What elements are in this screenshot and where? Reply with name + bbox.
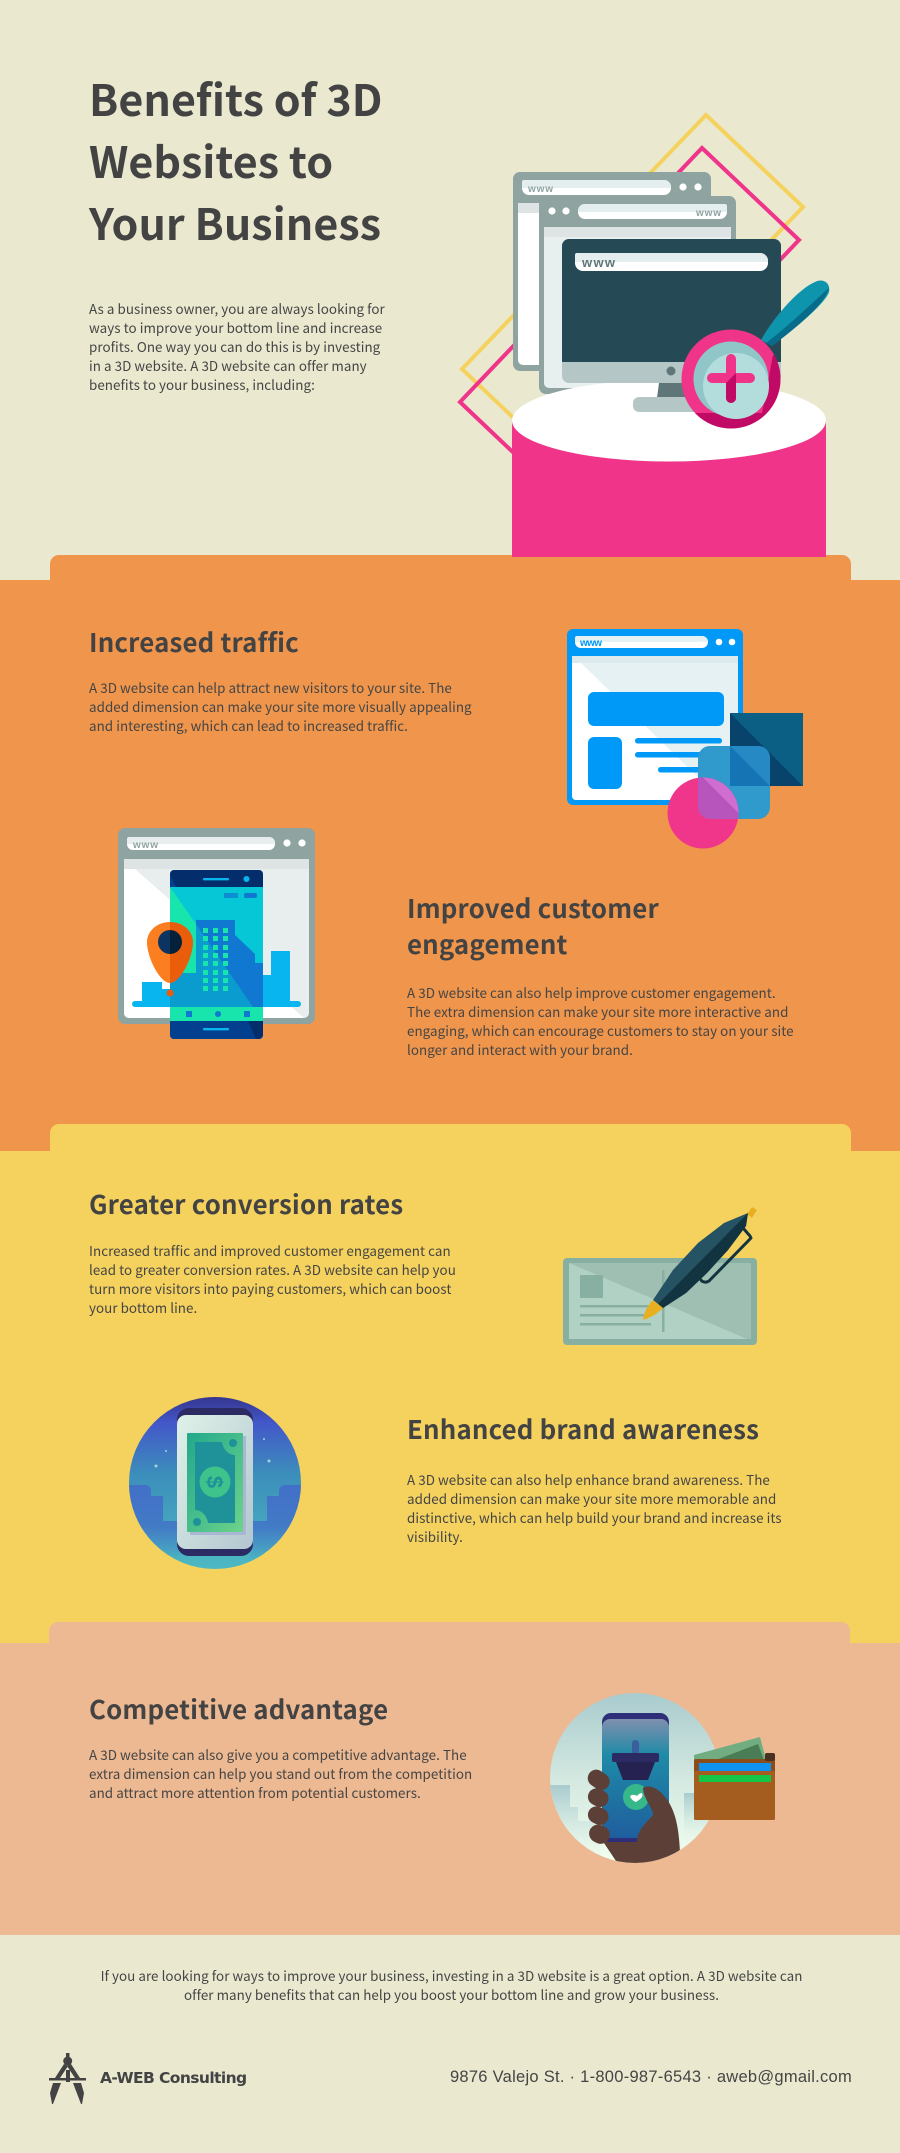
text: enhanced brand awareness: visibility. — [407, 1526, 463, 1546]
monitor — [562, 239, 781, 412]
back browser window: www — [527, 184, 553, 195]
location pin — [147, 922, 193, 996]
text: greater conversion rates: Increased traffic and improved customer engagement can — [89, 1240, 451, 1260]
illustration: browser windows on a pedestal with magnifier — [457, 112, 830, 557]
back browser window — [513, 172, 711, 371]
browser window — [567, 629, 743, 805]
text: improved customer engagement: A 3D website can also help improve customer engagement. — [407, 982, 776, 1002]
skyline — [132, 951, 301, 1007]
magnifier icon — [680, 280, 829, 440]
illustration: pen signing a card — [563, 1207, 757, 1345]
decorative diamonds — [460, 115, 803, 494]
heading: enhanced brand awareness: Enhanced brand awareness — [407, 1410, 759, 1447]
text: greater conversion rates — [89, 1240, 456, 1316]
browser window — [118, 828, 315, 1024]
card — [563, 1258, 757, 1345]
heading: improved customer engagement — [407, 889, 659, 962]
text: competitive advantage: and attract more attention from potential customers. — [89, 1782, 421, 1802]
text: greater conversion rates: lead to greater conversion rates. A 3D website can help you — [89, 1258, 456, 1278]
heading: improved customer engagement: Improved customer — [407, 889, 659, 926]
heading: greater conversion rates: Greater conversion rates — [89, 1184, 403, 1222]
text: increased traffic: A 3D website can help attract new visitors to your site. The — [89, 677, 452, 697]
pink circle — [668, 777, 739, 848]
text: increased traffic: and interesting, which can lead to increased traffic. — [89, 715, 408, 735]
text: competitive advantage: extra dimension can help you stand out from the competition — [89, 1762, 472, 1782]
brand name: A-WEB Consulting — [100, 2069, 247, 2087]
monitor: www — [581, 255, 616, 270]
intro paragraph: in a 3D website. A 3D website can offer many — [89, 355, 367, 375]
intro paragraph: As a business owner, you are always looking for — [89, 298, 385, 318]
illustration: browser with overlapping shapes — [567, 629, 803, 848]
text: improved customer engagement: longer and interact with your brand. — [407, 1038, 633, 1058]
text: enhanced brand awareness: added dimension can make your site more memorable and — [407, 1488, 776, 1508]
illustration: phone with banknote in a circle — [129, 1397, 301, 1569]
hand — [584, 1766, 680, 1864]
heading: improved customer engagement: engagement — [407, 925, 568, 962]
text: improved customer engagement — [407, 982, 794, 1058]
browser window: www — [132, 840, 158, 851]
text: enhanced brand awareness: A 3D website can also help enhance brand awareness. The — [407, 1468, 770, 1488]
logo icon: drafting compass — [49, 2053, 86, 2104]
pen — [643, 1207, 757, 1320]
text: competitive advantage — [89, 1744, 472, 1802]
conclusion text: offer many benefits that can help you boost your bottom line and grow your business. — [184, 1984, 719, 2004]
text: improved customer engagement: engaging, which can encourage customers to stay on your site — [407, 1020, 794, 1040]
text: enhanced brand awareness: distinctive, which can help build your brand and increase its — [407, 1506, 782, 1526]
wallet — [694, 1737, 775, 1820]
text: competitive advantage: A 3D website can also give you a competitive advantage. The — [89, 1744, 467, 1764]
phone — [170, 870, 263, 1039]
phone body — [177, 1408, 253, 1556]
panel: yellow section background — [0, 1124, 900, 1643]
heading: increased traffic: Increased traffic — [89, 622, 299, 660]
title: Your Business — [89, 190, 381, 252]
heading: competitive advantage: Competitive advantage — [89, 1690, 388, 1727]
banknote — [187, 1433, 246, 1535]
text: increased traffic — [89, 677, 472, 735]
illustration: hand holding phone with wallet — [550, 1693, 775, 1863]
middle browser window — [539, 196, 736, 394]
title — [88, 66, 383, 252]
intro paragraph: ways to improve your bottom line and increase — [89, 317, 382, 337]
dark square — [730, 713, 803, 786]
text: increased traffic: added dimension can make your site more visually appealing — [89, 696, 472, 716]
panel: orange section background — [0, 555, 900, 1151]
panel: peach section background — [0, 1622, 900, 1935]
building windows — [203, 928, 228, 991]
text: greater conversion rates: turn more visitors into paying customers, which can boost — [89, 1278, 451, 1298]
contact details: 9876 Valejo St. · 1-800-987-6543 · aweb@gmail.com — [450, 2068, 852, 2086]
banknote: $ — [202, 1476, 227, 1488]
conclusion text — [101, 1964, 802, 2004]
conclusion text: If you are looking for ways to improve your business, investing in a 3D website is a great option. A 3D website can — [101, 1964, 802, 1984]
title: Websites to — [89, 128, 333, 190]
text: improved customer engagement: The extra dimension can make your site more interactive and — [407, 1000, 788, 1020]
title: Benefits of 3D — [89, 66, 383, 128]
browser window: www — [579, 638, 602, 649]
text: greater conversion rates: your bottom line. — [89, 1296, 197, 1316]
middle browser window: www — [695, 208, 721, 219]
intro paragraph: benefits to your business, including: — [89, 374, 315, 394]
text: enhanced brand awareness — [407, 1468, 782, 1546]
intro paragraph: profits. One way you can do this is by investing — [89, 336, 380, 356]
intro paragraph — [89, 298, 385, 394]
pedestal — [512, 380, 826, 557]
phone — [602, 1713, 669, 1843]
illustration: browser with phone and location pin — [118, 828, 315, 1039]
translucent rounded square — [698, 746, 770, 819]
